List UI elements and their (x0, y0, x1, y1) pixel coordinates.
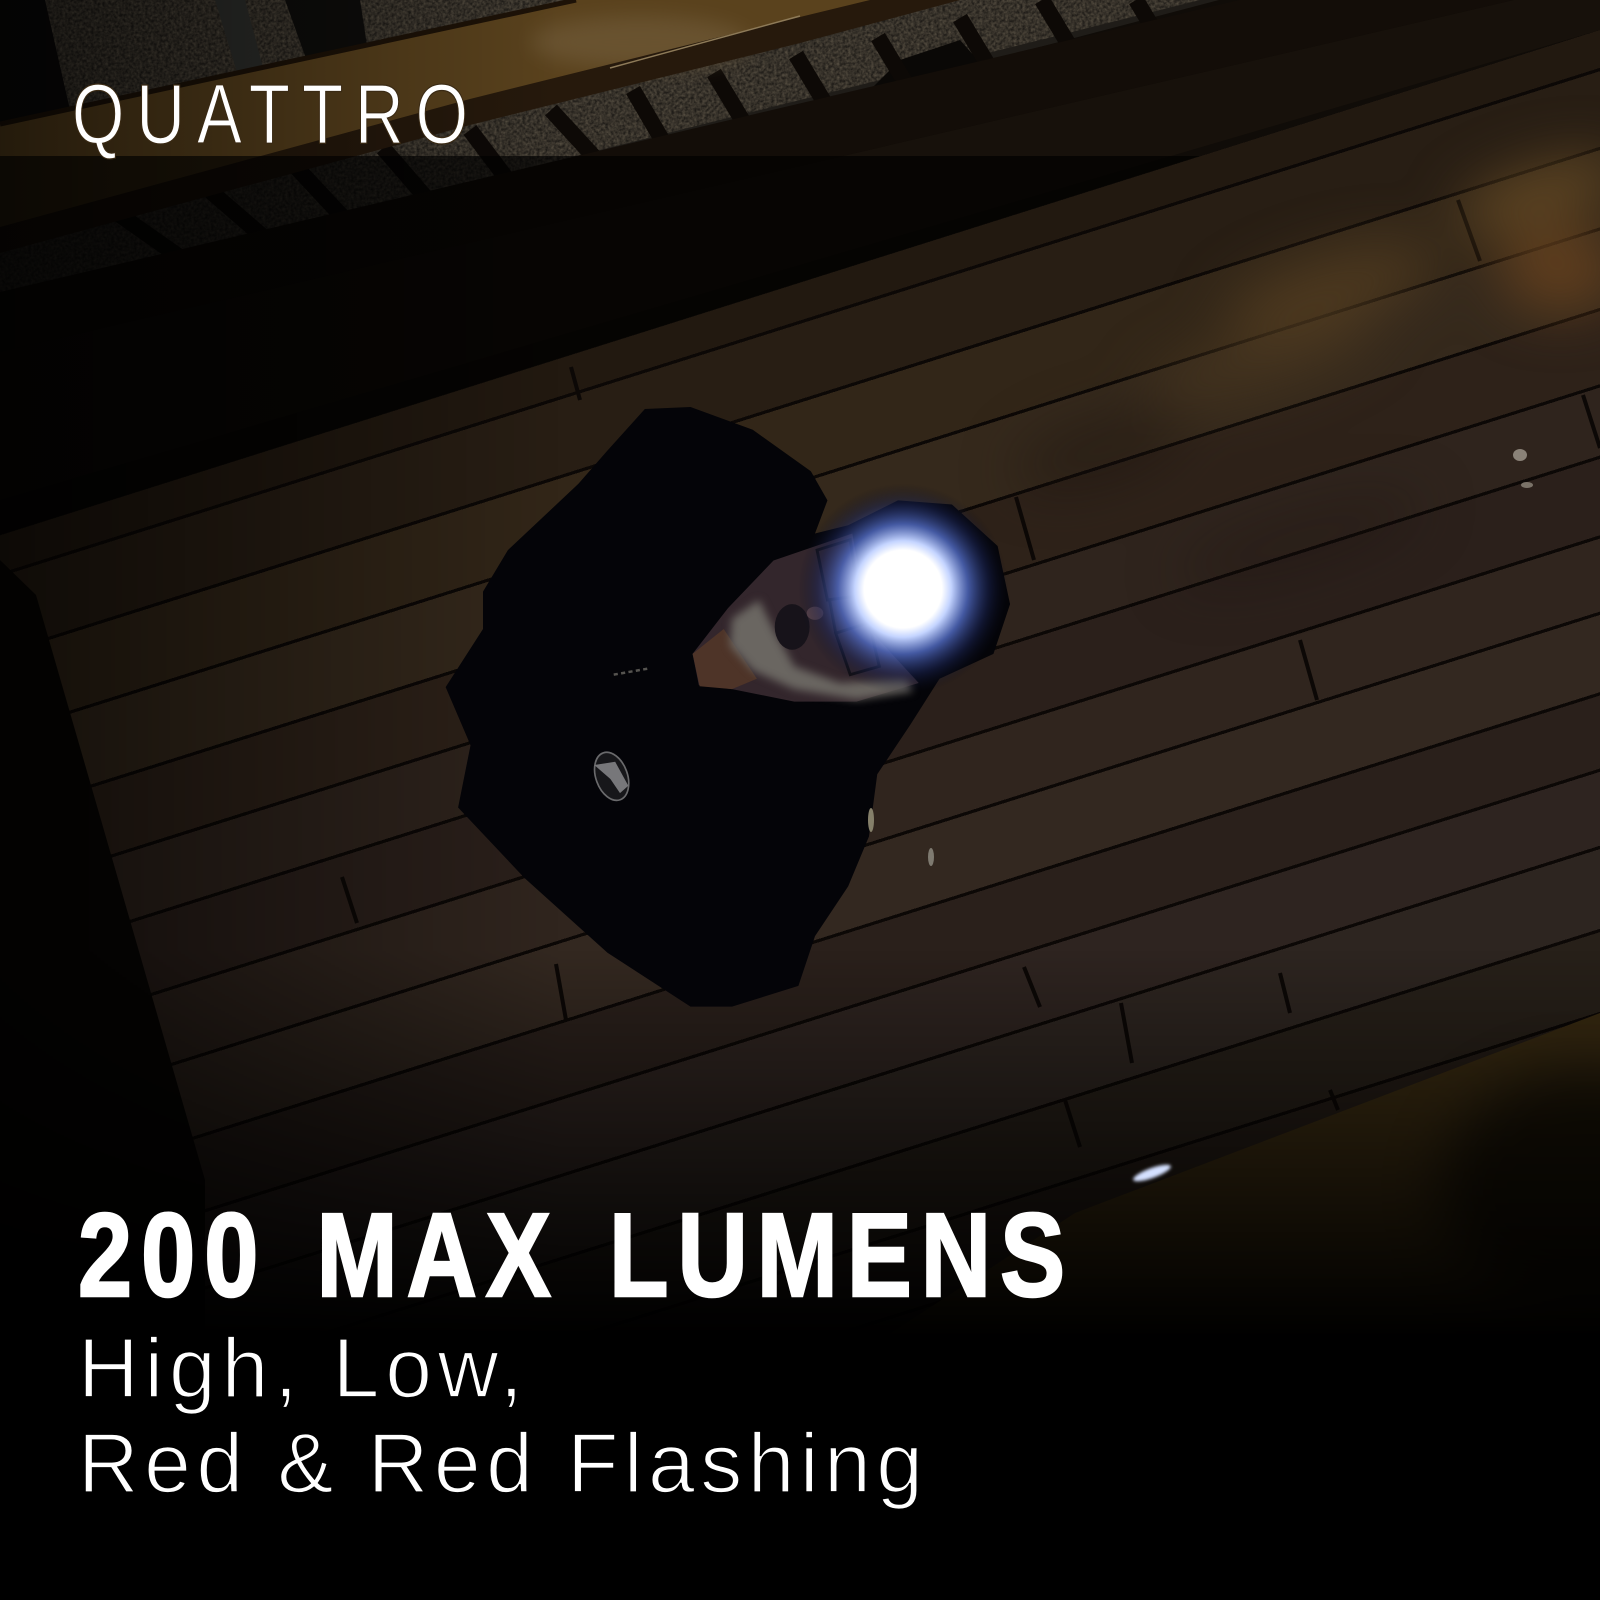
lower balustrade rail (0, 0, 1514, 352)
person wearing headlamp (446, 407, 1010, 1007)
plank end joints (342, 200, 1600, 1147)
title: QUATTRO: QUATTRO (72, 67, 480, 161)
face (588, 534, 919, 805)
body: black hoodie (446, 407, 1010, 1007)
top wooden handrail (0, 0, 930, 240)
beard (730, 600, 913, 700)
glasses (817, 540, 879, 675)
dark vertical posts (0, 0, 70, 125)
floor flecks and reflection (868, 449, 1533, 1185)
subtitle: High, Low, (78, 1321, 523, 1415)
jacket logo (588, 748, 635, 805)
subtitle (78, 1321, 923, 1510)
headline: 200 MAX LUMENS: 200 MAX LUMENS (78, 1189, 1074, 1322)
balusters (117, 0, 1160, 267)
warm light patches on planks (1005, 143, 1600, 607)
subtitle: Red & Red Flashing (78, 1416, 923, 1510)
jacket zip (614, 668, 649, 675)
eye shadow (775, 604, 810, 650)
lower right rail (880, 1013, 1600, 1340)
background photo: wooden deck scene (0, 0, 1600, 1280)
granite behind balusters (0, 0, 1218, 288)
left edge of deck (0, 560, 205, 1600)
headlamp glow (798, 484, 1008, 694)
